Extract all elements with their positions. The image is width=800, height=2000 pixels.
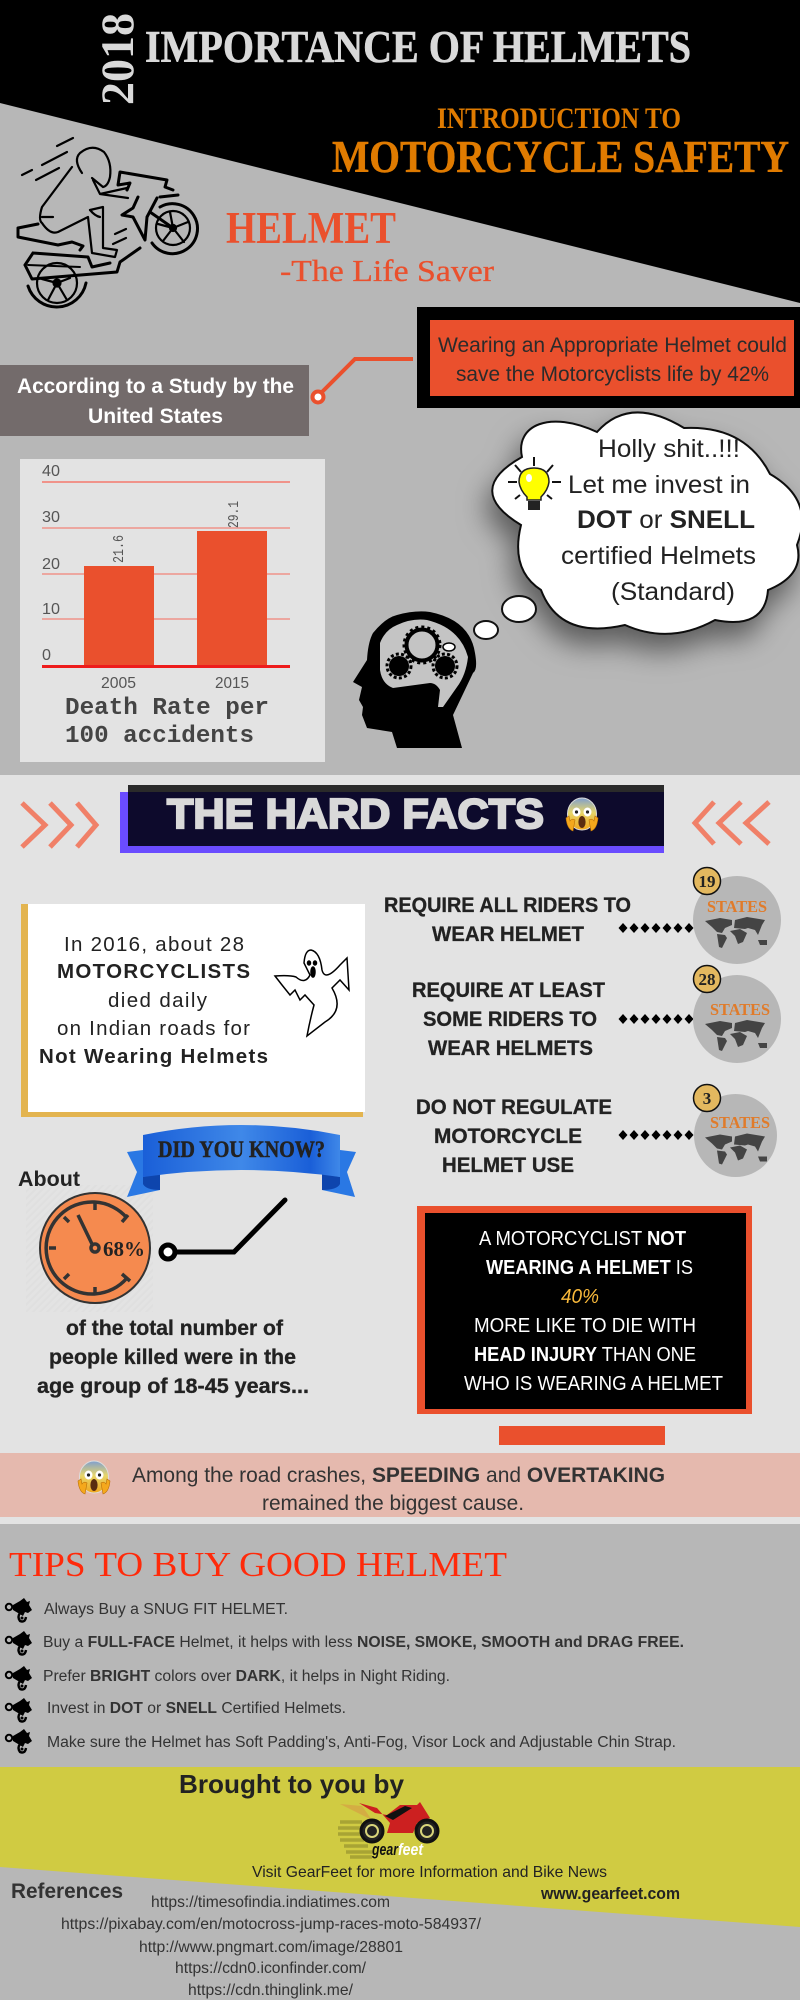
icon: head with gears <box>353 611 476 748</box>
connector from study label to callout <box>312 359 413 402</box>
tip 3: Prefer BRIGHT colors over DARK, it helps in Night Riding. <box>43 1668 450 1685</box>
black diagonal header panel <box>0 0 800 303</box>
panel: death rate bar chart: 10 <box>42 601 60 618</box>
dotted connector 3 <box>618 1130 694 1140</box>
tip 2: Buy a FULL-FACE Helmet, it helps with less NOISE, SMOKE, SMOOTH and DRAG FREE. <box>43 1634 684 1651</box>
badge: 3 states: STATES <box>710 1113 770 1132</box>
logo: gearfeet motorcycle: feet <box>398 1840 424 1859</box>
panel: death rate bar chart: 0 <box>42 647 51 664</box>
text: visit gearfeet: Visit GearFeet for more Information and Bike News <box>252 1864 607 1881</box>
dotted connector 2 <box>618 1014 694 1024</box>
icon: wheelie motorcycle rider <box>18 138 197 307</box>
panel: daily deaths card: MOTORCYCLISTS <box>57 960 250 983</box>
thought cloud: Let me invest in <box>568 471 750 499</box>
badge: 19 states <box>693 868 781 964</box>
panel: yellow sponsor band <box>0 1767 800 1927</box>
tip 5 <box>6 1729 676 1752</box>
panel: death rate bar chart: 2005 <box>101 675 136 692</box>
panel: death rate bar chart: 2015 <box>215 675 249 692</box>
tip 3 <box>6 1666 450 1690</box>
panel: daily deaths card: died daily <box>108 989 208 1012</box>
panel: daily deaths card <box>21 904 365 1117</box>
icon: screaming emoji <box>566 798 598 831</box>
text: brought to you by: Brought to you by <box>179 1769 405 1799</box>
panel: death rate bar chart: 100 accidents <box>65 723 254 750</box>
panel: death rate bar chart: 20 <box>42 556 60 573</box>
callout: appropriate helmet 42 percent: Wearing an Appropriate Helmet could <box>438 334 787 357</box>
text: do not regulate: MOTORCYCLE <box>434 1125 582 1148</box>
icon: chevrons right <box>22 803 96 847</box>
text: about: About <box>18 1168 80 1191</box>
panel: death rate bar chart: 40 <box>42 463 60 480</box>
thought cloud: certified Helmets <box>561 542 756 570</box>
tip 4: Invest in DOT or SNELL Certified Helmets. <box>47 1700 346 1717</box>
badge: 3 states <box>694 1084 777 1177</box>
heading: the life saver: -The Life Saver <box>280 253 495 288</box>
panel: daily deaths card: Not Wearing Helmets <box>39 1045 268 1068</box>
icon: speedometer 68 percent <box>40 1193 150 1303</box>
callout: head injury statistic: WHO IS WEARING A HELMET <box>464 1373 723 1395</box>
icon: light bulb <box>508 457 561 510</box>
ribbon: did you know <box>127 1125 356 1197</box>
icon: speedometer 68 percent: 68% <box>103 1237 145 1261</box>
connector from gauge to ribbon <box>161 1200 285 1259</box>
heading banner: the hard facts <box>120 785 664 853</box>
tip 5: Make sure the Helmet has Soft Padding's, Anti-Fog, Visor Lock and Adjustable Chin Strap. <box>47 1734 676 1751</box>
panel: daily deaths card: In 2016, about 28 <box>64 933 244 956</box>
tip 1 <box>6 1598 288 1622</box>
icon: chevrons left <box>695 802 769 844</box>
text: require some riders <box>412 979 605 1060</box>
badge: 19 states: STATES <box>707 897 767 916</box>
panel: death rate bar chart <box>20 459 325 762</box>
thought cloud: Holly shit..!!! <box>598 435 740 463</box>
tip 2 <box>6 1631 684 1654</box>
heading banner: the hard facts: THE HARD FACTS <box>167 790 544 837</box>
label: study by the United States <box>0 365 309 436</box>
band: road crash causes <box>0 1453 800 1517</box>
title: IMPORTANCE OF HELMETS <box>145 22 691 72</box>
hatched square behind speedometer <box>26 1185 153 1312</box>
references list: https://pixabay.com/en/motocross-jump-races-moto-584937/ <box>61 1916 482 1933</box>
callout: appropriate helmet 42 percent: save the Motorcyclists life by 42% <box>456 363 769 386</box>
callout: head injury statistic: 40% <box>561 1286 599 1308</box>
text: require some riders: REQUIRE AT LEAST <box>412 979 605 1002</box>
year label 2018: 2018 <box>92 13 144 105</box>
band: road crash causes: remained the biggest cause. <box>262 1492 524 1515</box>
callout: head injury statistic: A MOTORCYCLIST NOT <box>479 1228 686 1250</box>
callout: head injury statistic: WEARING A HELMET IS <box>486 1257 693 1279</box>
text: website: www.gearfeet.com <box>540 1885 680 1903</box>
label: study by the United States: United States <box>88 405 223 428</box>
text: age group statistic: people killed were in the <box>49 1346 296 1369</box>
heading: tips to buy good helmet: TIPS TO BUY GOOD HELMET <box>9 1545 507 1584</box>
ribbon: did you know: DID YOU KNOW? <box>158 1137 325 1162</box>
badge: 28 states <box>693 966 781 1063</box>
text: age group statistic: of the total number of <box>66 1317 284 1340</box>
label: study by the United States: According to a Study by the <box>17 375 294 398</box>
text: age group statistic: age group of 18-45 years... <box>37 1375 309 1398</box>
badge: 19 states: 19 <box>698 872 716 891</box>
logo: gearfeet motorcycle <box>338 1802 438 1859</box>
callout: head injury statistic: MORE LIKE TO DIE WITH <box>474 1315 696 1337</box>
badge: 3 states: 3 <box>703 1089 711 1108</box>
callout: appropriate helmet 42 percent <box>417 307 800 408</box>
text: require all riders <box>384 894 631 946</box>
tip 4 <box>6 1698 346 1722</box>
text: age group statistic <box>37 1317 309 1398</box>
badge: 28 states: STATES <box>710 1000 770 1019</box>
callout: head injury statistic: HEAD INJURY THAN ONE <box>474 1344 696 1366</box>
panel: death rate bar chart: 29.1 <box>226 501 243 528</box>
text: do not regulate: HELMET USE <box>442 1154 574 1177</box>
panel: death rate bar chart: Death Rate per <box>65 695 269 722</box>
band: road crash causes: Among the road crashes, SPEEDING and OVERTAKING <box>132 1464 665 1487</box>
references list: https://cdn0.iconfinder.com/ <box>175 1960 367 1977</box>
decorative orange bar <box>499 1426 665 1445</box>
panel: death rate bar chart: 30 <box>42 509 60 526</box>
callout: head injury statistic <box>417 1206 752 1414</box>
text: do not regulate <box>416 1096 612 1177</box>
icon: screaming emoji in band <box>78 1461 110 1494</box>
thought cloud <box>492 412 800 634</box>
badge: 28 states: 28 <box>698 970 716 989</box>
text: do not regulate: DO NOT REGULATE <box>416 1096 612 1119</box>
subtitle line 1: INTRODUCTION TO <box>437 102 681 135</box>
tip 1: Always Buy a SNUG FIT HELMET. <box>44 1601 288 1618</box>
references list: https://timesofindia.indiatimes.com <box>151 1894 390 1911</box>
thought cloud: (Standard) <box>611 578 735 606</box>
dotted connector 1 <box>618 923 694 933</box>
references list: https://cdn.thinglink.me/ <box>188 1982 354 1999</box>
heading: references: References <box>11 1880 123 1903</box>
panel: daily deaths card: on Indian roads for <box>57 1017 250 1040</box>
text: require all riders: WEAR HELMET <box>432 923 584 946</box>
thought bubbles <box>474 596 536 639</box>
icon: ghost <box>275 950 349 1036</box>
thought cloud: DOT or SNELL <box>577 506 755 534</box>
logo: gearfeet motorcycle: gear <box>371 1840 399 1859</box>
text: require some riders: SOME RIDERS TO <box>423 1008 597 1031</box>
panel: the hard facts section background <box>0 775 800 1524</box>
text: require some riders: WEAR HELMETS <box>428 1037 593 1060</box>
references list: http://www.pngmart.com/image/28801 <box>139 1939 403 1956</box>
references list <box>61 1894 482 1999</box>
panel: death rate bar chart: 21.6 <box>111 535 128 563</box>
text: require all riders: REQUIRE ALL RIDERS TO <box>384 894 631 917</box>
heading: HELMET: HELMET <box>226 203 396 253</box>
